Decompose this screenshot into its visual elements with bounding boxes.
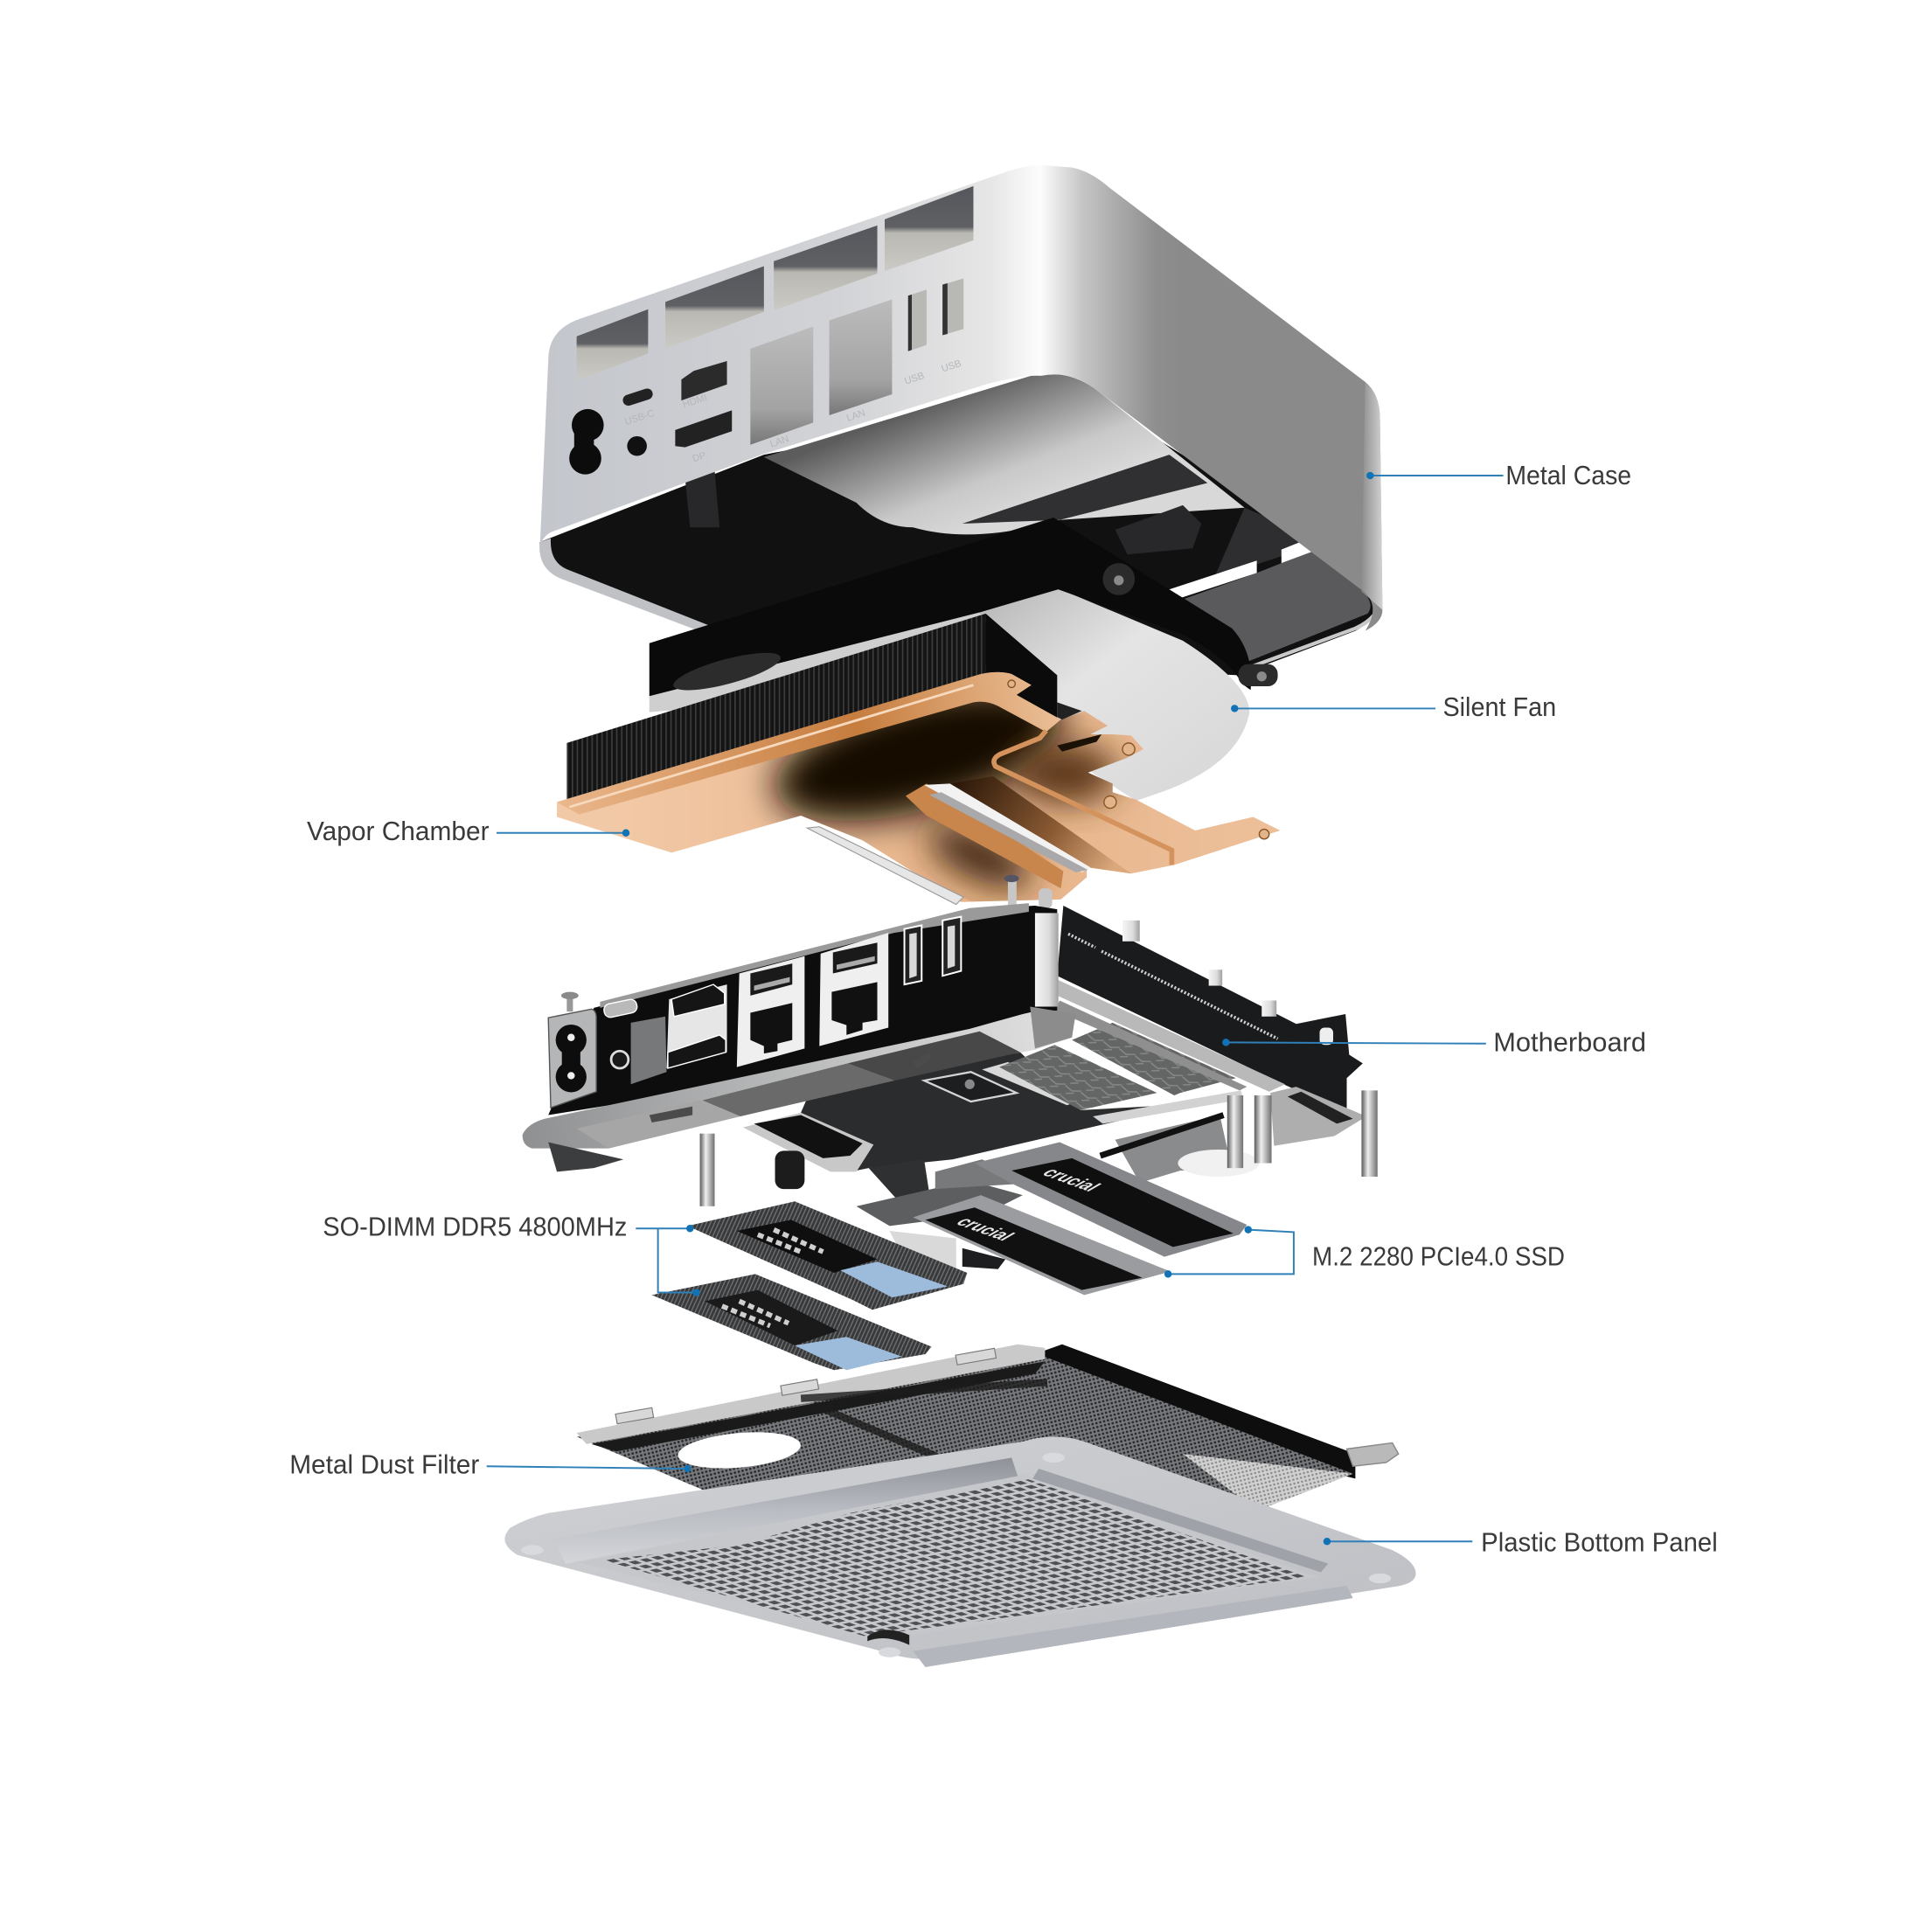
fan black shroud: [650, 518, 1251, 696]
callout: Metal Dust Filter: [289, 1451, 691, 1480]
USB interior: [909, 925, 955, 978]
callout: M.2 2280 PCIe4.0 SSD: [1164, 1226, 1565, 1278]
socket-side parts: [631, 1017, 667, 1084]
port captions: [623, 358, 963, 464]
CPU: [924, 1072, 1017, 1102]
case lower right lip: [1238, 594, 1380, 671]
right black wall: [1057, 906, 1363, 1113]
panel notch: [867, 1630, 909, 1645]
RAM sticker: [737, 1220, 878, 1273]
ceiling dark band: [963, 455, 1207, 524]
LAN block 1: [737, 956, 804, 1067]
screws: [1008, 680, 1269, 839]
CPU silver strip: [982, 1062, 1084, 1105]
port captions: USB-C: [623, 408, 656, 427]
power socket: [548, 1009, 596, 1108]
copper band highlight: [569, 685, 973, 807]
crucial brand: crucial: [950, 1214, 1019, 1244]
USB tongue 1: [754, 977, 789, 990]
metal dust filter: [577, 1345, 1399, 1516]
panel foot circles: [521, 1453, 1391, 1657]
case interior right wall: [1171, 547, 1371, 665]
frame inset panel 2: [702, 1063, 894, 1116]
callout: Motherboard: [1222, 1028, 1646, 1057]
HDMI: [671, 984, 725, 1017]
copper dark reflection: [761, 661, 1117, 900]
fan white housing: [980, 589, 1249, 801]
callout: Metal Case: Metal Case: [1505, 462, 1631, 490]
socket figure: [556, 1025, 587, 1092]
silent fan: [650, 518, 1278, 801]
filter silver top edge: [577, 1345, 1045, 1444]
USB-C hole: [622, 387, 654, 407]
USB tall 1: [905, 925, 921, 984]
callout: Plastic Bottom Panel: Plastic Bottom Panel: [1481, 1528, 1718, 1557]
lower fan arm: [1115, 1115, 1232, 1183]
SSD label: [925, 1207, 1143, 1290]
small handles: [650, 1053, 932, 1122]
socket screw: [566, 996, 573, 1011]
callout: M.2 2280 PCIe4.0 SSD: M.2 2280 PCIe4.0 SSD: [1312, 1242, 1565, 1271]
USB hole 1: [750, 963, 792, 996]
port captions: USB: [940, 358, 963, 375]
M.2 SSD upper: [975, 1143, 1247, 1257]
motherboard rods: [1004, 875, 1053, 912]
fan blade shadow: [671, 645, 783, 698]
bottom groove: [913, 1586, 1353, 1667]
filter tab: [1347, 1442, 1399, 1466]
inner copper rim: [994, 731, 1171, 865]
fan gap stripe: [1057, 702, 1081, 719]
heat sink fins: [566, 614, 986, 813]
case interior: [539, 394, 1380, 675]
heat sink black side: [986, 614, 1057, 727]
case ceiling: [764, 373, 1245, 534]
callout: Vapor Chamber: Vapor Chamber: [307, 817, 490, 846]
callout: SO-DIMM DDR5 4800MHz: SO-DIMM DDR5 4800MHz: [323, 1213, 627, 1242]
vapor chamber: [557, 614, 1280, 912]
filter black wall: [1045, 1345, 1355, 1478]
screw boss top: [1102, 563, 1278, 686]
white strip: [924, 783, 1090, 872]
case front plate: [539, 165, 1041, 552]
audio jack: [611, 1051, 629, 1068]
callout: Vapor Chamber: [307, 817, 629, 846]
filter mesh: [577, 1355, 1353, 1516]
copper plate: [557, 672, 1280, 902]
ribbon cable: [869, 1159, 929, 1206]
USB-C port: [603, 998, 638, 1018]
silver block: [890, 1231, 956, 1270]
panel inner floor: [579, 1474, 1318, 1639]
frame inset panel 1: [577, 1101, 740, 1149]
DDR5 module lower: [652, 1274, 932, 1370]
case lip: [539, 539, 764, 656]
interior upper right wall: [1213, 508, 1324, 579]
port panel back: [548, 906, 1057, 1115]
RAM sticker: [705, 1290, 837, 1345]
right silver mesh: [1270, 1087, 1366, 1146]
black clip: [775, 1150, 804, 1189]
filter round hole: [677, 1428, 803, 1473]
PCB two: [999, 1045, 1157, 1110]
LAN block 2: [819, 933, 888, 1046]
USB hole 2: [833, 942, 878, 973]
screw holes: [1114, 575, 1267, 681]
callout: Silent Fan: Silent Fan: [1442, 693, 1556, 722]
filter grooves: [801, 1382, 1047, 1456]
post collar: [1030, 1007, 1075, 1048]
crucial brand: crucial: [1037, 1165, 1106, 1194]
dark block: [963, 1248, 1005, 1269]
lower copper arm: [906, 783, 1063, 888]
port captions: LAN: [845, 408, 866, 424]
frame inset panel 3: [848, 1032, 1020, 1081]
silver strip lower: [807, 827, 963, 905]
RAM blue label: [840, 1261, 948, 1297]
filter light mesh: [1183, 1454, 1353, 1511]
frame foot: [548, 1143, 623, 1171]
port captions: LAN: [769, 434, 790, 449]
plastic bottom panel: [504, 1436, 1416, 1667]
underside board: [801, 1053, 1192, 1171]
RJ45 hole 1: [750, 1003, 792, 1053]
sticker text lines: [758, 1230, 824, 1252]
silver bracket: [935, 1159, 1035, 1189]
filter clips: [615, 1348, 996, 1424]
callout: Silent Fan: [1231, 693, 1556, 722]
slot interior: [754, 1115, 863, 1158]
tab hole: [1320, 1027, 1333, 1045]
case slots: [1167, 532, 1324, 601]
arm hole: [1178, 1150, 1259, 1177]
callout: Plastic Bottom Panel: [1324, 1528, 1718, 1557]
CPU screw: [965, 1080, 975, 1089]
side face right highlight: [1361, 382, 1382, 610]
RAM blue label: [795, 1337, 902, 1370]
motherboard: [523, 903, 1378, 1270]
HDMI hole: [681, 361, 727, 400]
rail inner: [1054, 1000, 1247, 1090]
RJ45 hole 2: [831, 982, 878, 1035]
audio hole: [627, 436, 647, 455]
port captions: DP: [691, 450, 707, 464]
callout: Metal Dust Filter: Metal Dust Filter: [289, 1451, 479, 1480]
top pegs: [1122, 921, 1276, 1017]
metal case: [539, 165, 1382, 675]
DP hole: [675, 410, 732, 448]
left groove: [553, 1457, 1018, 1564]
DDR5 module upper: [687, 1201, 967, 1310]
power hole: [569, 409, 604, 475]
connector dashes: [1068, 934, 1278, 1039]
callout: Motherboard: Motherboard: [1493, 1028, 1646, 1057]
case side face: [1041, 165, 1382, 631]
small black slot: [1057, 734, 1102, 752]
corner post: [1035, 913, 1059, 1007]
stand-offs: [700, 1090, 1378, 1206]
port windows: [750, 327, 813, 445]
perforations: [602, 1478, 1307, 1637]
arm black line: [1101, 1115, 1224, 1156]
callout: SO-DIMM DDR5 4800MHz: [323, 1213, 700, 1296]
silver rails: [1057, 980, 1285, 1092]
USB tall 2: [942, 917, 961, 976]
callout: Metal Case: [1366, 462, 1631, 490]
HDMI and DP housing: [667, 984, 727, 1068]
port captions: USB: [903, 371, 926, 387]
vent slots: [577, 309, 648, 381]
dark wedge between strip and arm: [950, 776, 1131, 873]
inner posts: [685, 470, 1201, 554]
left memory slot: [743, 1113, 873, 1171]
SSD bracket: [857, 1180, 1023, 1226]
PCB silver edge: [1093, 1090, 1243, 1123]
mesh slot: [1288, 1092, 1353, 1123]
copper upper band: [557, 672, 1061, 815]
right groove: [1032, 1469, 1328, 1572]
frame lip: [523, 1011, 1074, 1149]
DP: [668, 1035, 726, 1068]
filter black stripe: [592, 1361, 1045, 1451]
USB tongue 2: [837, 956, 875, 969]
top textured edge: [600, 903, 1029, 1008]
shroud highlight: [650, 612, 986, 712]
sticker text lines: [722, 1301, 789, 1326]
M.2 SSD lower: [913, 1195, 1171, 1295]
SSD label: [1011, 1158, 1234, 1247]
socket pins: [567, 1034, 575, 1080]
port captions: HDMI: [681, 393, 709, 410]
PCB one: [1072, 1023, 1236, 1095]
grey bar: [929, 792, 1088, 872]
